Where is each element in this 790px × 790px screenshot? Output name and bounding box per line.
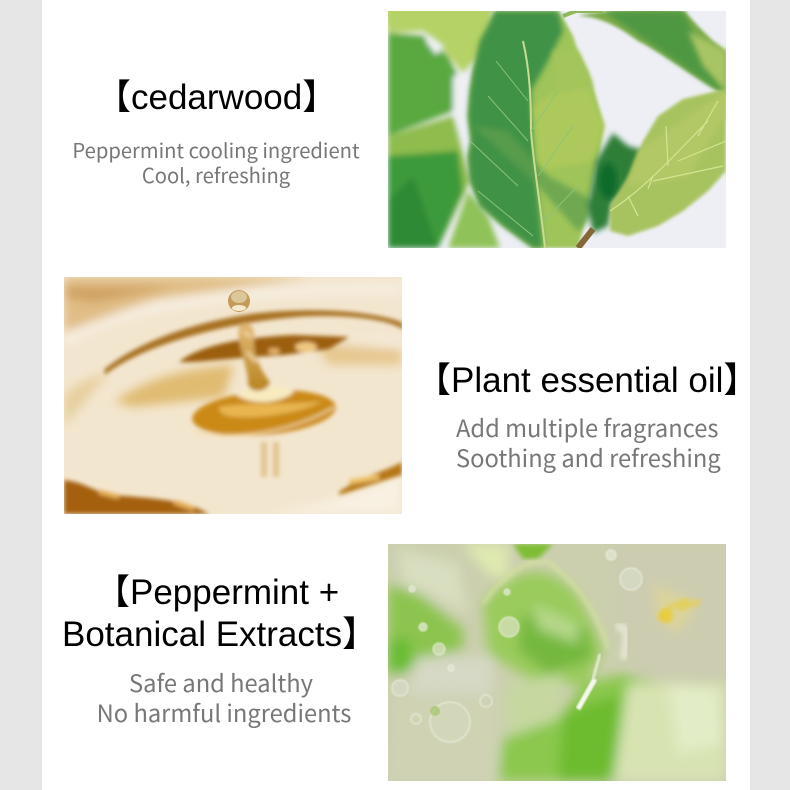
text: plant essential oil description	[456, 410, 721, 474]
panel: cedarwood	[72, 11, 726, 248]
heading: peppermint and botanical extracts: Botanical Extracts】	[62, 615, 377, 654]
text: peppermint description	[97, 665, 351, 729]
right leaf	[610, 89, 726, 236]
heading: peppermint and botanical extracts: 【Peppermint +	[95, 573, 339, 612]
image: mint leaves	[388, 11, 726, 248]
panel: peppermint and botanical extracts	[62, 544, 726, 781]
heading: peppermint and botanical extracts	[62, 573, 377, 654]
text: peppermint description: No harmful ingredients	[97, 695, 351, 729]
image: mint gel	[388, 544, 726, 781]
panel: plant essential oil	[64, 277, 758, 514]
text: plant essential oil description: Soothing and refreshing	[456, 440, 721, 474]
text: plant essential oil description: Add multiple fragrances	[456, 410, 718, 444]
text: peppermint description: Safe and healthy	[129, 665, 313, 699]
background foliage	[383, 6, 500, 248]
dark center small leaf	[588, 133, 646, 233]
heading: plant essential oil: 【Plant essential oil】	[416, 361, 758, 400]
image: oil droplet	[64, 277, 402, 514]
text: cedarwood description: Peppermint cooling ingredient	[72, 135, 360, 164]
top right leaf	[578, 10, 726, 95]
text: cedarwood description	[72, 135, 360, 189]
heading: cedarwood: 【cedarwood】	[96, 78, 337, 117]
center leaf	[468, 11, 604, 248]
text: cedarwood description: Cool, refreshing	[142, 160, 290, 189]
